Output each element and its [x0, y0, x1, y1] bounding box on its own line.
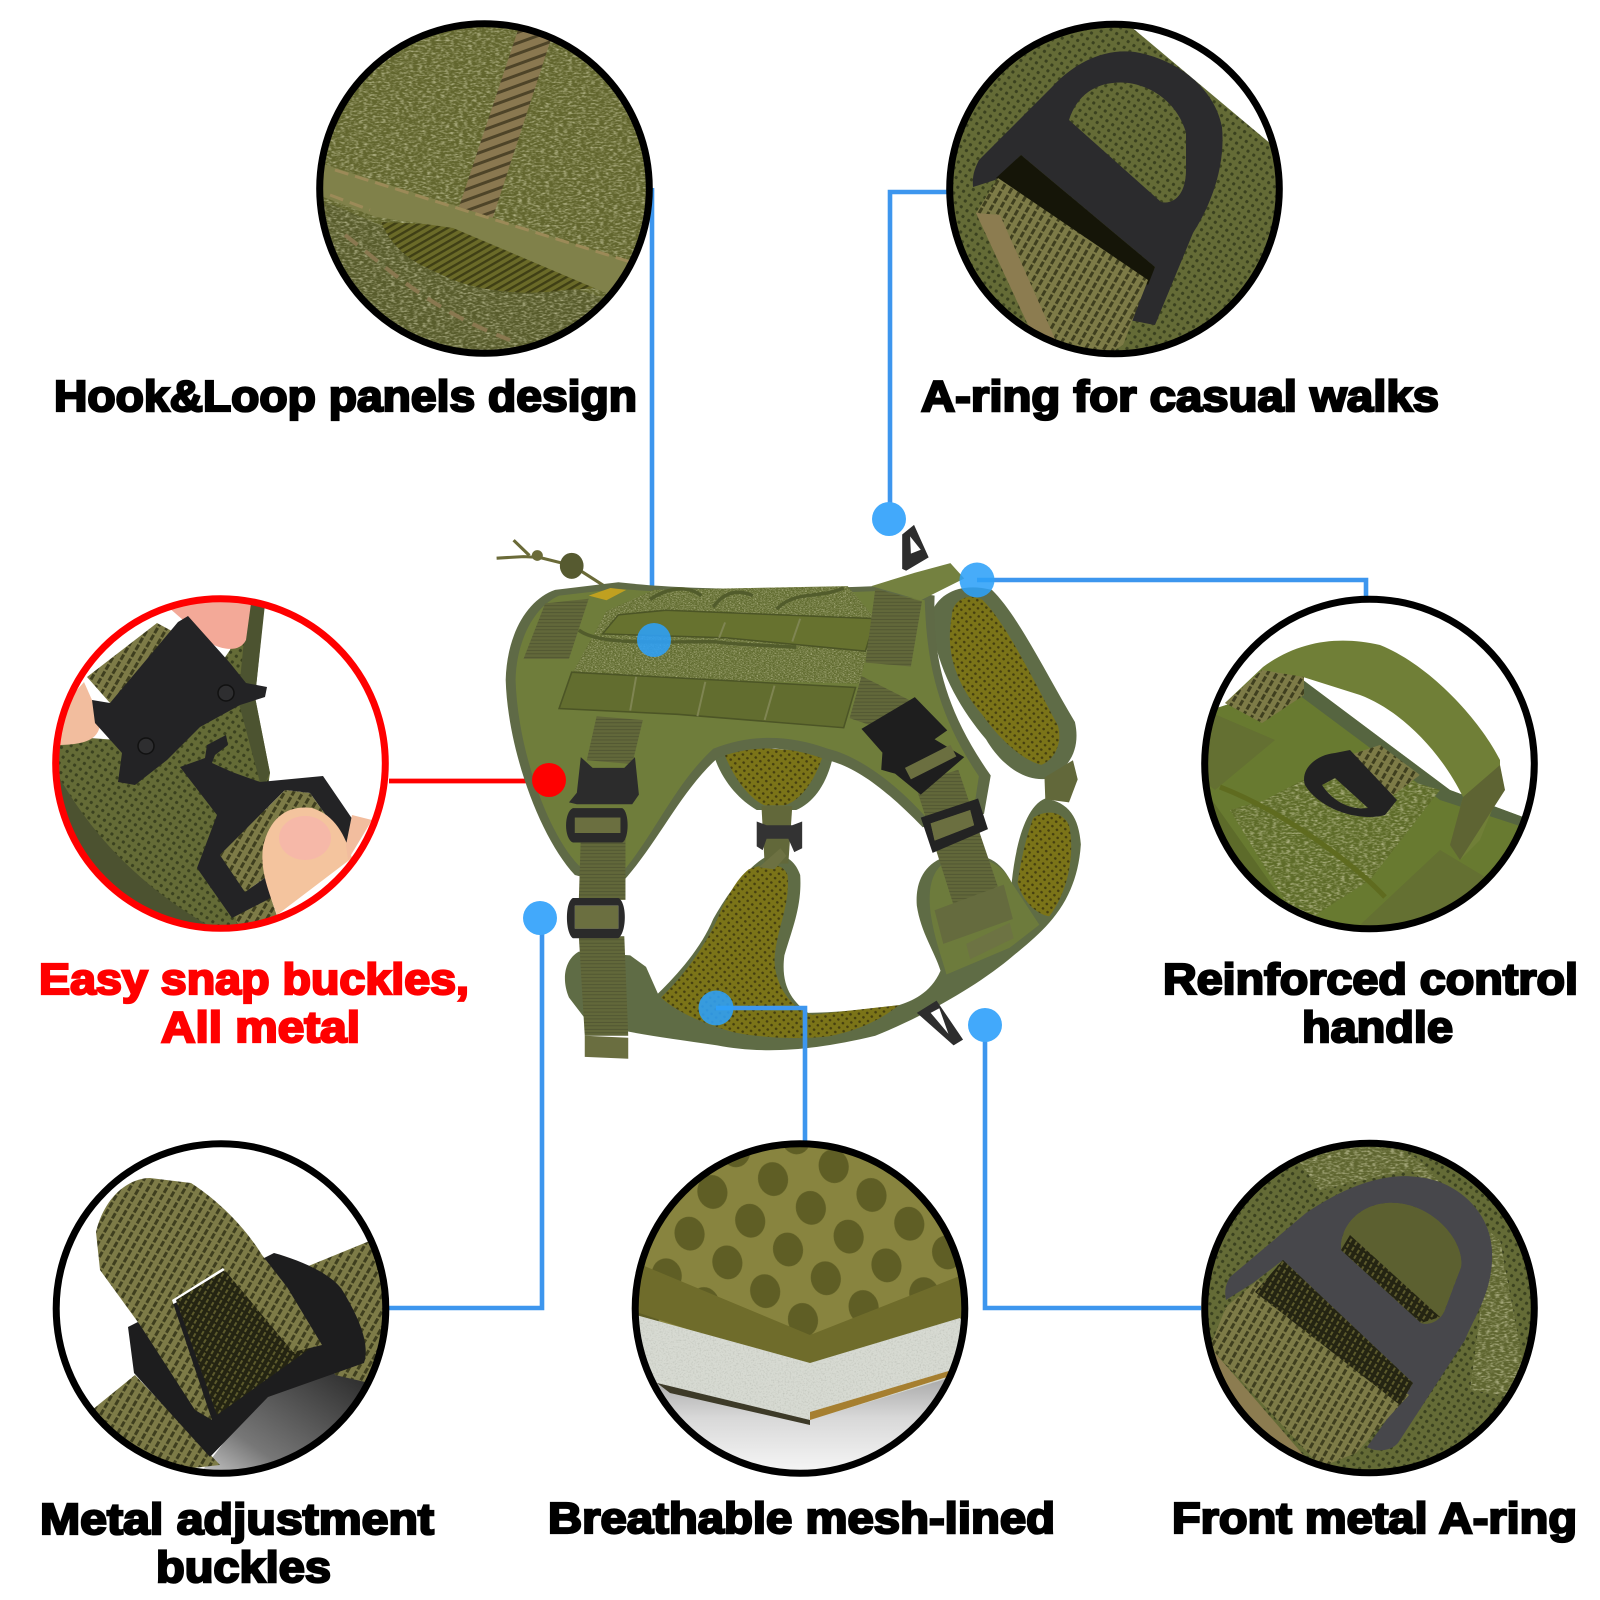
backdrop shadow: [656, 1379, 945, 1470]
top A-ring: [902, 525, 929, 571]
elastic cord: [381, 222, 600, 293]
hook and loop panels: [559, 586, 875, 728]
ring outline: [320, 24, 649, 353]
panel: control handle detail: [1201, 596, 1538, 932]
panel: A-ring detail: [940, 15, 1290, 365]
handle and stitched strap: [865, 563, 964, 666]
fabric: [59, 632, 270, 925]
red ring outline: [56, 599, 385, 928]
small center strap slider: [757, 806, 802, 869]
lower buckle: [180, 735, 353, 918]
label: hook and loop: Hook&Loop panels design: [54, 373, 637, 421]
ring outline: [635, 1144, 965, 1473]
right shoulder mesh pad: [931, 587, 1077, 779]
webbing band: [323, 166, 628, 293]
harness body: [1210, 680, 1522, 925]
black buckle: [128, 1253, 366, 1457]
lower strap: [92, 1375, 220, 1475]
connector: control handle: [977, 580, 1366, 597]
lower strap end: [236, 898, 277, 924]
connector: A-ring to harness: [890, 192, 947, 519]
left snap buckle and strap: [566, 716, 643, 1059]
label: front A-ring: Front metal A-ring: [1172, 1495, 1577, 1543]
lower seam stitches: [345, 235, 510, 340]
small strap: [1354, 745, 1420, 796]
flag patch: [589, 588, 626, 600]
ring outline: [950, 24, 1279, 354]
label: handle: handle: [1302, 1004, 1453, 1052]
right connector strap: [1044, 760, 1078, 802]
label: buckles: buckles: [156, 1544, 331, 1592]
callout dot: adjustment buckle: [523, 901, 557, 935]
ring body: [1225, 1176, 1492, 1450]
ring outline: [1205, 1143, 1534, 1473]
bungee cord and toggle: [497, 540, 610, 590]
lower felt: [324, 201, 603, 350]
laces: [579, 588, 844, 647]
felt patch: [1290, 1130, 1530, 1400]
connector: snap buckle: [389, 779, 549, 783]
callout dot: handle: [960, 562, 994, 598]
label: all metal: All metal: [161, 1004, 360, 1052]
panel: breathable mesh detail: [625, 1135, 975, 1480]
mesh surface: [638, 1147, 958, 1335]
callout dot: mesh: [698, 990, 734, 1026]
bottom A-ring: [917, 1001, 963, 1045]
callout dot: A-ring: [872, 502, 906, 536]
ring outline: [1205, 599, 1534, 929]
main body panel: [506, 582, 991, 887]
gap behind strap: [996, 155, 1155, 285]
connector: front A-ring: [985, 1025, 1201, 1308]
callout dot: snap buckle: [532, 763, 566, 797]
shoulder strap webbing: [523, 599, 589, 659]
gray shadow: [204, 1374, 365, 1470]
small D-ring: [1304, 750, 1397, 817]
connector: adjustment buckle: [389, 918, 542, 1308]
view through the hole: [1341, 1203, 1461, 1324]
callout dot: front A-ring: [968, 1008, 1002, 1042]
top strap: [87, 623, 171, 703]
center chest pad: [711, 745, 834, 810]
shock cord: [1220, 787, 1385, 897]
thumb: [262, 807, 352, 915]
panel: front A-ring detail: [1195, 1130, 1545, 1485]
connector: breathable mesh: [716, 1008, 805, 1141]
fabric base edge: [810, 1370, 952, 1420]
connector: hook and loop to harness: [650, 188, 654, 640]
velcro patches: [1230, 778, 1440, 916]
panel: hook and loop detail: [310, 15, 660, 370]
top buckle: [92, 616, 267, 785]
fingers: [172, 602, 251, 649]
panel: adjustment buckle detail: [56, 1144, 395, 1480]
ring outline: [56, 1144, 386, 1473]
label: reinforced control: Reinforced control: [1163, 956, 1578, 1004]
white corner: [1133, 28, 1269, 142]
label: snap buckles: Easy snap buckles,: [39, 956, 469, 1004]
harness product illustration: [497, 525, 1081, 1059]
looped strap: [96, 1178, 322, 1420]
handle loop: [1225, 640, 1500, 816]
callout dot: hook and loop: [637, 623, 671, 657]
right snap buckle and strap: [850, 676, 1014, 959]
right strap: [309, 1242, 382, 1382]
inner webbing: [176, 1268, 312, 1415]
label: breathable mesh: Breathable mesh-lined: [548, 1495, 1055, 1543]
foam layer: [638, 1316, 961, 1412]
panel: snap buckle detail: [50, 595, 385, 935]
label: metal adjustment: Metal adjustment: [40, 1496, 434, 1544]
stitched seam: [458, 30, 552, 220]
strap: [1210, 1280, 1409, 1467]
label: A-ring: A-ring for casual walks: [921, 373, 1439, 421]
strap: [976, 178, 1148, 360]
black ring: [973, 51, 1223, 325]
lower strap body and chest pad: [565, 799, 1081, 1050]
